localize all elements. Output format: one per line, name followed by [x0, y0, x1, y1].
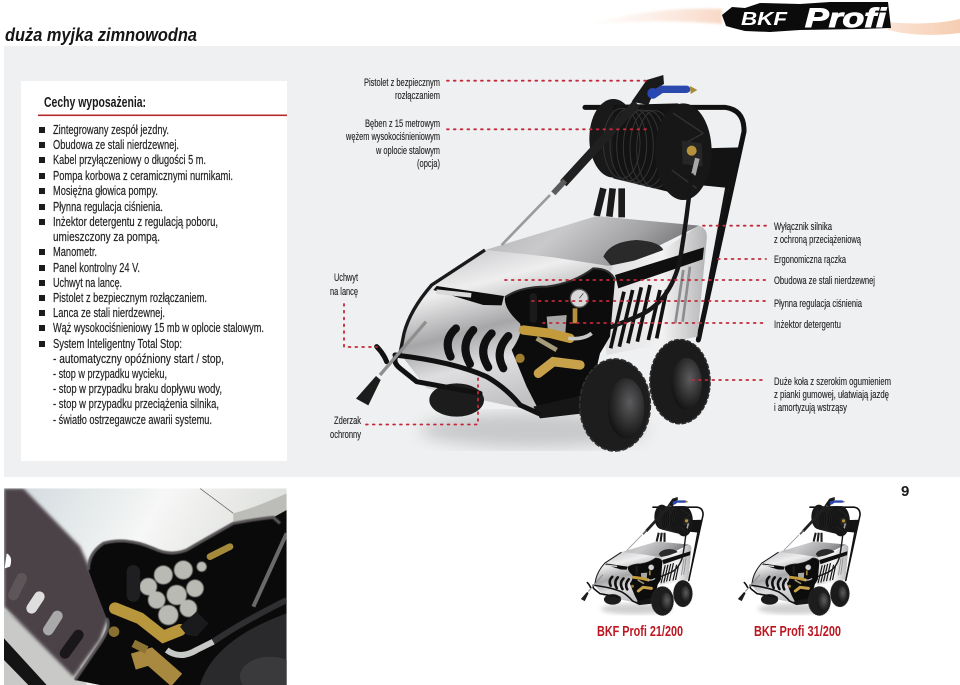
- features list: Uchwyt na lancę.: [53, 276, 122, 290]
- callout: drum: Bęben z 15 metrowym: [365, 118, 440, 130]
- callout: gun: [364, 77, 440, 102]
- model thumbnail: 21/200: [581, 497, 703, 615]
- features list: [53, 123, 264, 427]
- callout: lance holder: Uchwyt: [334, 272, 358, 284]
- callout: lance holder: na lancę: [330, 286, 358, 298]
- callout: detergent injector: Inżektor detergentu: [774, 319, 841, 331]
- page title: duża myjka zimnowodna: [5, 24, 197, 45]
- callout: drum: w oplocie stalowym: [375, 145, 440, 157]
- heading: features: Cechy wyposażenia:: [44, 95, 146, 111]
- features list: - stop w przypadku braku dopływu wody,: [53, 382, 222, 396]
- features list: Pompa korbowa z ceramicznymi nurnikami.: [53, 169, 233, 183]
- features list: Wąż wysokociśnieniowy 15 mb w oplocie stalowym.: [53, 321, 264, 335]
- features list: Manometr.: [53, 245, 97, 259]
- features list: - stop w przypadku przeciążenia silnika,: [53, 397, 219, 411]
- features list: Pistolet z bezpiecznym rozłączaniem.: [53, 291, 207, 305]
- features list: Obudowa ze stali nierdzewnej.: [53, 138, 179, 152]
- photo: pump close-up: [4, 488, 300, 685]
- callout: motor switch: Wyłącznik silnika: [774, 221, 832, 233]
- logo: BKF Profi: BKF: [741, 9, 788, 29]
- features list: Płynna regulacja ciśnienia.: [53, 200, 163, 214]
- callout: wheels: z pianki gumowej, ułatwiają jazdę: [774, 389, 889, 401]
- features list: Kabel przyłączeniowy o długości 5 m.: [53, 153, 206, 167]
- callout: lance holder: [330, 272, 358, 298]
- callout: wheels: [774, 376, 891, 414]
- heading rule: [38, 114, 287, 116]
- features list: System Inteligentny Total Stop:: [53, 337, 182, 351]
- callout: bumper: ochronny: [330, 429, 361, 441]
- callout: bumper: [330, 415, 361, 441]
- callout: handle: Ergonomiczna rączka: [774, 254, 846, 266]
- callout: housing: Obudowa ze stali nierdzewnej: [774, 275, 875, 287]
- features list: - automatyczny opóźniony start / stop,: [53, 352, 224, 366]
- features list: Zintegrowany zespół jezdny.: [53, 123, 169, 137]
- model name: 21/200: BKF Profi 21/200: [597, 623, 683, 640]
- features list: Panel kontrolny 24 V.: [53, 261, 140, 275]
- callout: drum: (opcja): [417, 158, 440, 170]
- callout: motor switch: [774, 221, 861, 246]
- callout: drum: wężem wysokociśnieniowym: [345, 131, 440, 143]
- callout: gun: Pistolet z bezpiecznym: [364, 77, 440, 89]
- model thumbnail: 31/200: [738, 497, 860, 615]
- callout: pressure control: Płynna regulacja ciśnienia: [774, 298, 862, 310]
- features list: Inżektor detergentu z regulacją poboru,: [53, 215, 218, 229]
- features list: - światło ostrzegawcze awarii systemu.: [53, 413, 212, 427]
- callout: wheels: i amortyzują wstrząsy: [774, 402, 847, 414]
- model name: 31/200: BKF Profi 31/200: [754, 623, 841, 640]
- features list: Mosiężna głowica pompy.: [53, 184, 158, 198]
- callout: drum: [345, 118, 440, 170]
- panel: grey product band: [4, 46, 960, 477]
- features list: umieszczony za pompą.: [53, 230, 160, 244]
- logo swoosh: [582, 9, 960, 35]
- leader lines: [344, 81, 766, 424]
- product photo: pressure washer with hose reel: [356, 75, 744, 451]
- callout: motor switch: z ochroną przeciążeniową: [774, 234, 861, 246]
- callout: wheels: Duże koła z szerokim ogumieniem: [774, 376, 891, 388]
- logo: BKF Profi: [722, 2, 891, 33]
- page number: 9: [901, 483, 909, 500]
- panel: features card: [21, 81, 287, 461]
- callout: bumper: Zderzak: [334, 415, 361, 427]
- features list: - stop w przypadku wycieku,: [53, 367, 167, 381]
- bullet markers: [39, 127, 45, 347]
- callout: gun: rozłączaniem: [395, 90, 440, 102]
- features list: Lanca ze stali nierdzewnej.: [53, 306, 165, 320]
- logo: BKF Profi: Profi: [805, 3, 887, 33]
